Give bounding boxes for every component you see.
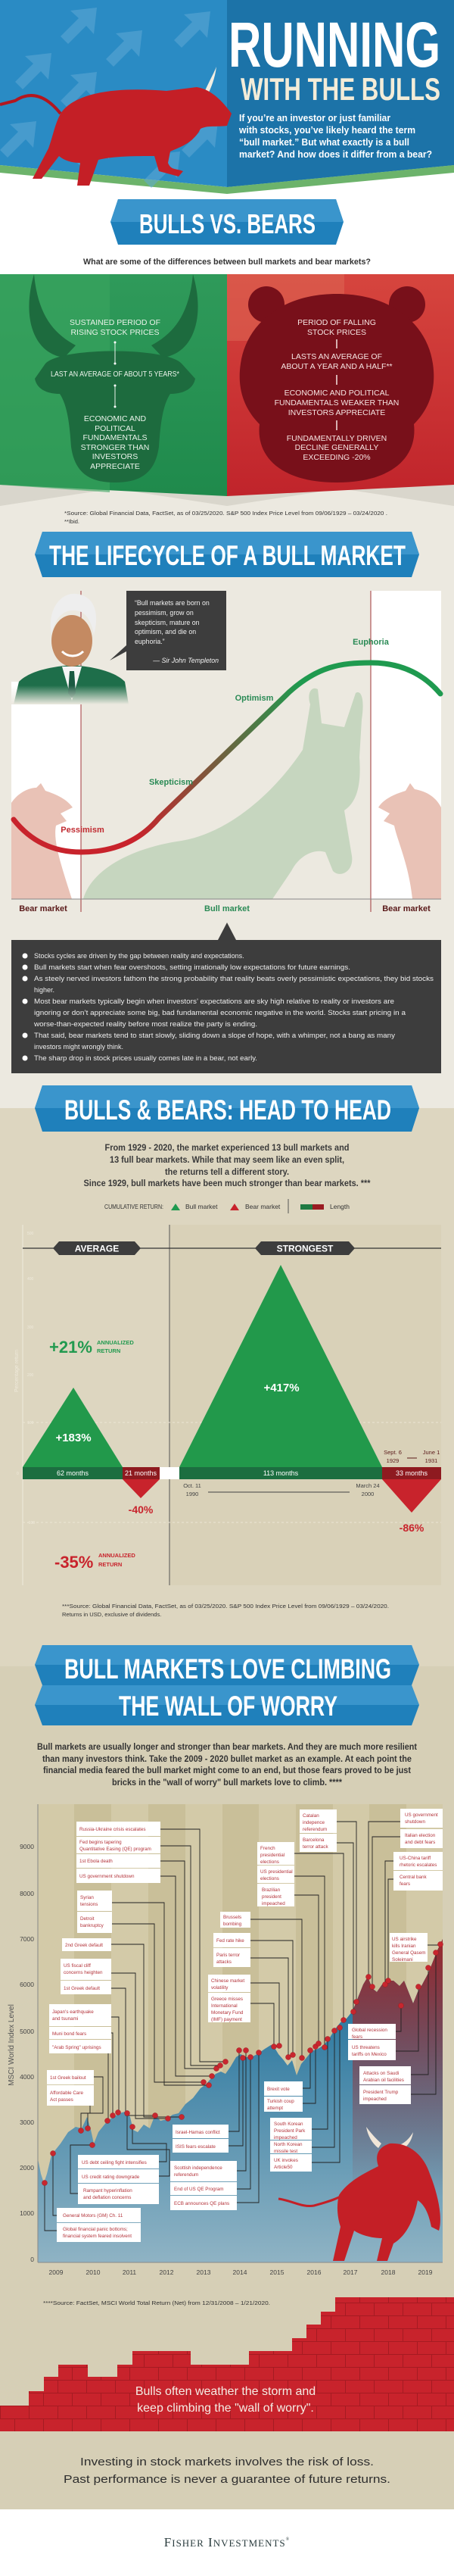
chart: head to head: 21 months bbox=[125, 1469, 157, 1477]
chart: head to head: -100 bbox=[27, 1521, 35, 1525]
wall intro bbox=[37, 1743, 417, 1788]
lifecycle chart: Skepticism bbox=[149, 778, 193, 787]
chart: wall of worry: Barcelona bbox=[303, 1838, 325, 1843]
chart: wall of worry: concerns heighten bbox=[64, 1970, 103, 1975]
chart: wall of worry: North Korean bbox=[274, 2142, 303, 2147]
chart: wall of worry: referendum bbox=[303, 1827, 327, 1832]
banner: wall of worry: THE WALL OF WORRY bbox=[119, 1691, 337, 1722]
disclaimer: Investing in stock markets involves the risk of loss. bbox=[80, 2456, 374, 2468]
source note 1: **Ibid. bbox=[64, 518, 79, 525]
quote box: — Sir John Templeton bbox=[152, 657, 219, 664]
chart: wall of worry: Muni bond fears bbox=[52, 2031, 86, 2037]
chart: wall of worry: 2010 bbox=[86, 2268, 101, 2276]
chart: wall of worry: tariffs on Mexico bbox=[352, 2052, 387, 2057]
icon: bear right bbox=[378, 783, 441, 899]
bear text: PERIOD OF FALLING bbox=[297, 318, 376, 327]
chart: wall of worry: Monetary Fund bbox=[211, 2010, 244, 2016]
bullet box: That said, bear markets tend to start slowly, sliding down a slope of hope, with a whimper, not a bang as many bbox=[34, 1032, 396, 1039]
chart: head to head: 200 bbox=[27, 1373, 34, 1378]
chart: wall of worry: Brussels bbox=[223, 1915, 241, 1920]
chart: head to head: 1990 bbox=[186, 1491, 198, 1497]
chart: head to head: 0 bbox=[17, 1472, 19, 1476]
annualized returns bbox=[49, 1338, 134, 1357]
chart: wall of worry: 4000 bbox=[20, 2073, 34, 2081]
chart: wall of worry: 5000 bbox=[20, 2028, 34, 2035]
chart: wall of worry: Italian election bbox=[405, 1833, 436, 1838]
bear text: STOCK PRICES bbox=[307, 328, 366, 337]
chart: wall of worry: Article50 bbox=[274, 2165, 293, 2170]
pill: average: AVERAGE bbox=[75, 1244, 119, 1254]
chart: wall of worry: 2018 bbox=[381, 2268, 396, 2276]
chart: wall of worry: 2013 bbox=[197, 2268, 211, 2276]
intro text: “bull market.” But what exactly is a bull bbox=[239, 137, 409, 148]
lifecycle chart: Bear market bbox=[19, 904, 67, 913]
chart: head to head: 62 months bbox=[57, 1469, 89, 1477]
chart: wall of worry: fears bbox=[400, 1881, 410, 1887]
icon: bull silhouette bbox=[83, 688, 363, 899]
chart: wall of worry: and tsunami bbox=[52, 2016, 78, 2022]
intro text: market? And how does it differ from a bear? bbox=[239, 149, 432, 160]
bull text: RISING STOCK PRICES bbox=[70, 328, 160, 337]
bullet box: investors might wrongly think. bbox=[34, 1043, 123, 1051]
head to head intro: From 1929 - 2020, the market experienced 13 bull markets and bbox=[104, 1144, 350, 1153]
bullet box bbox=[11, 923, 441, 1073]
source note 3: Returns in USD, exclusive of dividends. bbox=[62, 1611, 161, 1618]
chart: head to head: +183% bbox=[55, 1432, 92, 1444]
chart: wall of worry: Affordable Care bbox=[50, 2090, 83, 2096]
bull text: LAST AN AVERAGE OF ABOUT 5 YEARS* bbox=[51, 370, 179, 379]
chart: wall of worry: Global recession bbox=[352, 2028, 387, 2033]
question: What are some of the differences between bull markets and bear markets? bbox=[83, 258, 371, 267]
chart: wall of worry: 2015 bbox=[270, 2268, 285, 2276]
wall intro: than many investors think. Take the 2009 - 2020 bullet market as an example. At each point the bbox=[42, 1755, 412, 1764]
panel: bear bbox=[227, 274, 454, 496]
banner: wall of worry bbox=[35, 1645, 419, 1725]
chart: wall of worry: President Park bbox=[274, 2128, 306, 2134]
chart: wall of worry: 8000 bbox=[20, 1890, 34, 1897]
chart: wall of worry: Brazilian bbox=[262, 1888, 281, 1893]
chart: head to head: RETURN bbox=[98, 1561, 122, 1568]
chart: wall of worry: indepence bbox=[303, 1820, 325, 1825]
bullet box: Stocks cycles are driven by the gap between reality and expectations. bbox=[34, 952, 244, 960]
bullet box: higher. bbox=[34, 986, 54, 994]
chart: wall of worry: elections bbox=[260, 1876, 279, 1881]
quote box bbox=[110, 591, 226, 670]
chart: wall of worry: 2009 bbox=[49, 2268, 64, 2276]
chart: head to head: 33 months bbox=[396, 1469, 428, 1477]
chart: wall of worry: fears bbox=[352, 2034, 362, 2040]
chart: wall of worry: President Trump bbox=[363, 2090, 399, 2095]
chart: wall of worry: attempt bbox=[267, 2106, 283, 2111]
bull text: SUSTAINED PERIOD OF bbox=[70, 318, 160, 327]
chart: wall of worry: 2019 bbox=[418, 2268, 433, 2276]
chart: wall of worry: Japan's earthquake bbox=[52, 2009, 94, 2015]
chart: wall of worry: Central bank bbox=[400, 1875, 428, 1880]
chart: wall of worry: 3000 bbox=[20, 2119, 34, 2126]
icon: bear left bbox=[11, 783, 73, 899]
chart: wall of worry: and deflation concerns bbox=[83, 2195, 131, 2200]
chart: head to head: Sept. 6 bbox=[384, 1449, 402, 1456]
chart: wall of worry: 2nd Greek default bbox=[65, 1943, 103, 1948]
source note 3 bbox=[62, 1603, 389, 1618]
bear text: DECLINE GENERALLY bbox=[295, 443, 378, 452]
chart: wall of worry: president bbox=[262, 1894, 281, 1900]
chart: wall of worry: End of US QE Program bbox=[174, 2187, 223, 2192]
head to head intro: Since 1929, bull markets have been much stronger than bear markets. *** bbox=[83, 1179, 371, 1188]
chart: head to head: 400 bbox=[27, 1277, 34, 1282]
chart: wall of worry: Fed begins tapering bbox=[79, 1840, 122, 1845]
source note 1 bbox=[64, 510, 387, 525]
chart: wall of worry: Fed rate hike bbox=[216, 1938, 244, 1944]
chart: wall of worry: ECB announces QE plans bbox=[174, 2201, 229, 2206]
bullet box: Bull markets start when fear overshoots, setting irrationally low expectations for future earnings. bbox=[34, 963, 350, 971]
bullet box: Most bear markets typically begin when investors’ expectations are sky high relative to reality or investors are bbox=[34, 998, 394, 1005]
chart: wall of worry: impeached bbox=[274, 2135, 297, 2140]
bullet box: ignoring or don’t appreciate some big, bad fundamental economic negative in the world. Stocks start pricing in a bbox=[34, 1009, 406, 1016]
chart: wall of worry: terror attack bbox=[303, 1844, 328, 1850]
chart: wall of worry: 6000 bbox=[20, 1981, 34, 1988]
chart: wall of worry: US presidential bbox=[260, 1869, 293, 1875]
pill: strongest bbox=[255, 1241, 355, 1255]
chart: head to head: +417% bbox=[263, 1382, 300, 1394]
chart: wall of worry: Attacks on Saudi bbox=[363, 2071, 399, 2076]
chart: wall of worry: MSCI World Index Level bbox=[8, 2004, 16, 2086]
chart: head to head: 500 bbox=[27, 1232, 34, 1236]
chart: wall of worry: US fiscal cliff bbox=[64, 1963, 91, 1969]
chart: wall of worry: (IMF) payment bbox=[211, 2017, 242, 2022]
chart: head to head: -40% bbox=[129, 1503, 154, 1516]
chart: wall of worry: Turkish coup bbox=[267, 2099, 294, 2104]
source note 1: *Source: Global Financial Data, FactSet, as of 03/25/2020. S&P 500 Index Price Level from 09/06/1929 – 03/24/2020 . bbox=[64, 510, 387, 517]
lifecycle chart: Pessimism bbox=[61, 826, 104, 835]
bullet box: As steely nerved investors fathom the strong probability that reality beats overly pessimistic expectations, they bid stocks bbox=[34, 975, 434, 982]
quote box: skepticism, mature on bbox=[135, 619, 200, 626]
bear text: FUNDAMENTALS WEAKER THAN bbox=[275, 398, 399, 407]
chart: wall of worry: 2012 bbox=[160, 2268, 174, 2276]
bull text bbox=[51, 318, 179, 471]
chart: wall of worry: US credit rating downgrade bbox=[82, 2175, 140, 2180]
bull text: APPRECIATE bbox=[90, 462, 140, 471]
chart: head to head: -35% bbox=[54, 1553, 93, 1572]
banner: lifecycle bbox=[35, 532, 419, 577]
lifecycle chart: Euphoria bbox=[353, 638, 390, 647]
legend: Bull market bbox=[185, 1203, 218, 1210]
source note 3: ***Source: Global Financial Data, FactSet, as of 03/25/2020. S&P 500 Index Price Level from 09/06/1929 – 03/24/2020. bbox=[62, 1603, 389, 1610]
chart: wall of worry: elections bbox=[260, 1859, 279, 1865]
chart: wall of worry: Israel-Hamas conflict bbox=[176, 2130, 220, 2135]
chart: wall of worry: financial system feared insolvent bbox=[63, 2234, 132, 2239]
chart: wall of worry: South Korean bbox=[274, 2122, 303, 2127]
chart: wall of worry: US airstrike bbox=[392, 1937, 417, 1942]
banner: head to head bbox=[35, 1085, 419, 1132]
legend: Length bbox=[330, 1203, 350, 1210]
chart: wall of worry: General Motors (GM) Ch. 11 bbox=[63, 2213, 123, 2218]
chart: head to head: 100 bbox=[27, 1421, 34, 1425]
chart: wall of worry: "Arab Spring" uprisings bbox=[52, 2045, 101, 2050]
intro text bbox=[238, 113, 432, 160]
lifecycle chart: Bear market bbox=[382, 904, 431, 913]
chart: wall of worry: 2000 bbox=[20, 2164, 34, 2172]
chart: wall of worry: Catalan bbox=[303, 1813, 319, 1819]
banner: bulls vs bears bbox=[110, 199, 344, 245]
quote box: “Bull markets are born on bbox=[135, 599, 210, 607]
chart: wall of worry: Arabian oil facilities bbox=[363, 2078, 404, 2083]
legend bbox=[104, 1199, 350, 1213]
icon: bull head bbox=[29, 274, 198, 482]
chart: wall of worry: Detroit bbox=[80, 1916, 95, 1922]
bull text: POLITICAL bbox=[95, 424, 135, 433]
chart: wall of worry: impeached bbox=[262, 1901, 285, 1906]
title bbox=[229, 9, 440, 107]
chart: wall of worry: impeached bbox=[363, 2097, 387, 2102]
chart: wall of worry: ISIS fears escalate bbox=[176, 2144, 216, 2150]
banner: bulls vs bears: BULLS VS. BEARS bbox=[139, 208, 316, 239]
head to head intro: 13 full bear markets. While that may seem like an even split, bbox=[110, 1156, 344, 1165]
chart: wall of worry: US threatens bbox=[352, 2045, 380, 2050]
icon: Sir John Templeton bbox=[11, 594, 132, 704]
bull text: ECONOMIC AND bbox=[84, 414, 147, 423]
chart: wall of worry: shutdown bbox=[405, 1819, 425, 1825]
chart: wall of worry: referendum bbox=[174, 2172, 198, 2178]
wall intro: financial media feared the bull market might come to an end, but those fears proved to be just bbox=[43, 1766, 411, 1775]
chart: head to head: 300 bbox=[27, 1325, 34, 1330]
chart: wall of worry: bombing bbox=[223, 1922, 242, 1927]
chart: wall of worry bbox=[8, 1804, 443, 2276]
head to head intro: the returns tell a different story. bbox=[165, 1168, 289, 1177]
chart: wall of worry: rhetoric escalates bbox=[400, 1863, 437, 1868]
pill: strongest: STRONGEST bbox=[277, 1244, 334, 1254]
pill: average bbox=[53, 1241, 141, 1255]
chart: head to head: Percentage return bbox=[14, 1350, 20, 1392]
chart: wall of worry: US debt ceiling fight intensifies bbox=[82, 2160, 147, 2165]
chart: wall of worry: 1st Greek bailout bbox=[50, 2075, 86, 2081]
bear text bbox=[275, 318, 399, 462]
chart: wall of worry: Chinese market bbox=[211, 1978, 244, 1984]
chart: wall of worry: US government bbox=[405, 1813, 438, 1818]
chart: wall of worry: Quantitative Easing (QE) program bbox=[79, 1847, 151, 1852]
panel: bull bbox=[0, 274, 227, 496]
chart: wall of worry: US government shutdown bbox=[79, 1874, 135, 1879]
chart: wall of worry: Soleimani bbox=[392, 1957, 413, 1962]
chart: head to head: March 24 bbox=[356, 1482, 380, 1489]
chart: wall of worry: Greece misses bbox=[211, 1997, 243, 2002]
chart: wall of worry: Rampant hyperinflation bbox=[83, 2188, 132, 2194]
chart: wall of worry: volatility bbox=[211, 1985, 229, 1991]
bear text: FUNDAMENTALLY DRIVEN bbox=[287, 434, 387, 443]
chart: wall of worry: bankruptcy bbox=[80, 1923, 104, 1928]
chart: wall of worry: 9000 bbox=[20, 1843, 34, 1850]
chart: head to head bbox=[14, 1225, 441, 1585]
bull text: FUNDAMENTALS bbox=[83, 433, 147, 442]
chart: head to head: 1929 bbox=[387, 1457, 399, 1464]
icon: charging bull bbox=[278, 2127, 440, 2261]
bullet box: The sharp drop in stock prices usually comes late in a bear, not early. bbox=[34, 1054, 257, 1062]
chart: wall of worry: UK invokes bbox=[274, 2158, 298, 2163]
chart: wall of worry: General Qasem bbox=[392, 1950, 425, 1956]
disclaimer: Past performance is never a guarantee of future returns. bbox=[64, 2474, 390, 2486]
chart: head to head: 1931 bbox=[425, 1457, 437, 1464]
chart: wall of worry: attacks bbox=[216, 1959, 232, 1965]
curve bbox=[14, 663, 440, 852]
bear text: INVESTORS APPRECIATE bbox=[288, 408, 385, 417]
quote box: optimism, and die on bbox=[135, 628, 196, 635]
legend: CUMULATIVE RETURN: bbox=[104, 1203, 163, 1210]
chart: wall of worry: 2017 bbox=[344, 2268, 358, 2276]
chart: wall of worry: missile test bbox=[274, 2149, 297, 2154]
chart: head to head: 113 months bbox=[263, 1469, 299, 1477]
chart: head to head: June 1 bbox=[423, 1449, 440, 1456]
chart: wall of worry: presidential bbox=[260, 1853, 285, 1858]
chart: wall of worry: 2014 bbox=[233, 2268, 247, 2276]
chart: wall of worry: 0 bbox=[30, 2256, 34, 2263]
chart: wall of worry: Russia-Ukraine crisis escalates bbox=[79, 1827, 145, 1832]
intro text: If you’re an investor or just familiar bbox=[239, 113, 390, 123]
wall intro: bricks in the "wall of worry" bull markets love to climb. **** bbox=[112, 1778, 342, 1788]
chart: head to head: -86% bbox=[400, 1522, 424, 1534]
brick wall: Bulls often weather the storm and bbox=[135, 2385, 316, 2398]
chart: wall of worry: US-China tariff bbox=[400, 1856, 431, 1861]
bull text: STRONGER THAN bbox=[81, 443, 149, 452]
chart: wall of worry: 2011 bbox=[123, 2268, 136, 2276]
bull text: INVESTORS bbox=[92, 452, 138, 461]
chart: wall of worry: French bbox=[260, 1846, 275, 1851]
wall intro: Bull markets are usually longer and stronger than bear markets. And they are much more resilient bbox=[37, 1743, 417, 1752]
brick wall: keep climbing the "wall of worry". bbox=[137, 2402, 314, 2415]
annualized returns: RETURN bbox=[97, 1347, 120, 1354]
chart: head to head: Oct. 11 bbox=[183, 1482, 201, 1489]
legend: Bear market bbox=[245, 1203, 281, 1210]
chart: wall of worry: 1st Ebola death bbox=[79, 1859, 113, 1864]
quote box: pessimism, grow on bbox=[135, 609, 194, 617]
chart: wall of worry: 1000 bbox=[20, 2209, 34, 2217]
chart: wall of worry: 2016 bbox=[307, 2268, 322, 2276]
annualized returns: ANNUALIZED bbox=[97, 1339, 134, 1346]
head to head intro bbox=[83, 1144, 371, 1188]
annualized returns: +21% bbox=[49, 1338, 92, 1357]
chart: wall of worry: kills Iranian bbox=[392, 1944, 416, 1949]
bear text: ABOUT A YEAR AND A HALF** bbox=[281, 362, 393, 371]
icon: running bull bbox=[0, 67, 232, 186]
disclaimer bbox=[64, 2456, 390, 2486]
brick wall bbox=[0, 2297, 454, 2431]
chart: wall of worry: Paris terror bbox=[216, 1953, 240, 1958]
bullet box: worse-than-expected reality before most realize the party is ending. bbox=[33, 1020, 257, 1028]
bear text: ECONOMIC AND POLITICAL bbox=[285, 389, 390, 398]
chart: wall of worry: Brexit vote bbox=[267, 2087, 290, 2092]
quote box: euphoria.” bbox=[135, 638, 165, 645]
chart: head to head: 2000 bbox=[362, 1491, 374, 1497]
chart: wall of worry: Global financial panic bottoms; bbox=[63, 2227, 128, 2232]
bear text: EXCEEDING -20% bbox=[303, 453, 371, 462]
chart: wall of worry: 7000 bbox=[20, 1935, 34, 1943]
chart: wall of worry: International bbox=[211, 2003, 238, 2009]
source note 4: ****Source: FactSet, MSCI World Total Return (Net) from 12/31/2008 – 1/21/2020. bbox=[43, 2301, 270, 2306]
chart: wall of worry: tensions bbox=[80, 1902, 98, 1907]
logo: Fisher Investments: ® bbox=[286, 2537, 290, 2542]
chart: wall of worry: and debt fears bbox=[405, 1840, 435, 1845]
icon: bear head bbox=[240, 286, 434, 482]
header background bbox=[0, 0, 454, 194]
chart: wall of worry: Syrian bbox=[80, 1895, 94, 1900]
lifecycle chart: Bull market bbox=[204, 904, 250, 913]
lifecycle chart: Optimism bbox=[235, 694, 274, 703]
chart: wall of worry: Act passes bbox=[50, 2097, 73, 2103]
lifecycle chart bbox=[11, 591, 441, 913]
logo: Fisher Investments: FISHER INVESTMENTS bbox=[164, 2535, 286, 2549]
intro text: with stocks, you’ve likely heard the term bbox=[238, 125, 415, 136]
chart: wall of worry: Scottish independence bbox=[174, 2165, 222, 2171]
chart: wall of worry: 1st Greek default bbox=[64, 1986, 100, 1991]
bear text: LASTS AN AVERAGE OF bbox=[291, 352, 382, 361]
chart: head to head: ANNUALIZED bbox=[98, 1552, 135, 1559]
